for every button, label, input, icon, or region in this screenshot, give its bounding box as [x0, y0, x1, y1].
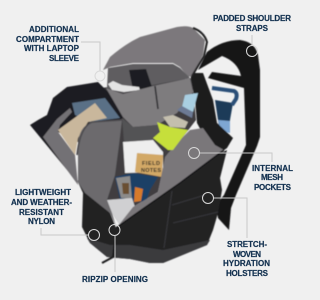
callout: additional compartment: SLEEVE: [49, 54, 80, 63]
purple packet edge: [177, 106, 193, 118]
flap black edge: [116, 150, 224, 228]
callout: internal mesh pockets: INTERNAL: [252, 164, 293, 173]
callout: lightweight nylon: [11, 188, 100, 240]
callout: hydration holsters: HOLSTERS: [226, 269, 269, 278]
callout: hydration holsters: WOVEN: [233, 250, 261, 259]
callout: lightweight nylon: LIGHTWEIGHT: [15, 188, 71, 197]
dark flap lining: [57, 92, 123, 142]
pocket zip: [155, 86, 158, 109]
callout: lightweight nylon: NYLON: [28, 217, 55, 226]
white cable: [108, 81, 140, 92]
zipper pull: [102, 240, 115, 263]
callout: additional compartment: [16, 25, 105, 81]
food containers: [115, 173, 158, 202]
shoulder strap: [198, 40, 260, 230]
left grey strip: [43, 108, 78, 185]
main black body: [77, 150, 227, 263]
left black flap shell: [30, 82, 123, 182]
field notes notebook: FIELD: [142, 161, 160, 167]
lime item: [153, 122, 188, 150]
callout: internal mesh pockets: [188, 148, 293, 192]
callout: padded shoulder straps: PADDED SHOULDER: [213, 14, 291, 23]
lid dark rim: [192, 28, 207, 76]
blue-grey clothing: [72, 98, 120, 122]
light blue packet: [182, 93, 198, 112]
field notes notebook: NOTES: [141, 168, 161, 174]
callout: additional compartment: ADDITIONAL: [29, 25, 79, 34]
callout: internal mesh pockets: MESH: [261, 173, 283, 182]
body seam: [164, 191, 218, 248]
black mesh pocket: [190, 73, 233, 153]
callout: padded shoulder straps: STRAPS: [236, 24, 269, 33]
callout: ripzip opening: [82, 224, 148, 284]
tan clothing: [58, 103, 107, 155]
callout: hydration holsters: HYDRATION: [223, 259, 270, 268]
callout: lightweight nylon: RESISTANT: [19, 208, 64, 217]
water bottle: [212, 88, 237, 133]
dark grey under pocket: [122, 118, 168, 142]
left grey flap lining: [78, 120, 122, 226]
black item inside lid: [129, 69, 152, 90]
callout: hydration holsters: [202, 192, 270, 278]
lid: [103, 26, 205, 77]
white packet: [107, 198, 135, 225]
callout: lightweight nylon: AND WEATHER-: [11, 198, 72, 207]
callout: additional compartment: WITH LAPTOP: [24, 44, 80, 53]
callout: hydration holsters: STRETCH-: [227, 240, 267, 249]
white paper: [123, 140, 163, 173]
roll: [163, 115, 188, 128]
lid interior: [107, 64, 190, 93]
field notes notebook: [135, 153, 163, 177]
callout: padded shoulder straps: [213, 14, 291, 56]
flap rim: [77, 120, 122, 155]
callout: internal mesh pockets: POCKETS: [254, 183, 292, 192]
backpack illustration: [30, 26, 260, 263]
bottom base panel: [87, 238, 210, 263]
callout: ripzip opening: RIPZIP OPENING: [82, 275, 148, 284]
callout: additional compartment: COMPARTMENT: [16, 35, 79, 44]
right grey flap: [118, 128, 224, 226]
front grey pocket: [106, 78, 193, 127]
inner dark cavity: [100, 78, 196, 225]
